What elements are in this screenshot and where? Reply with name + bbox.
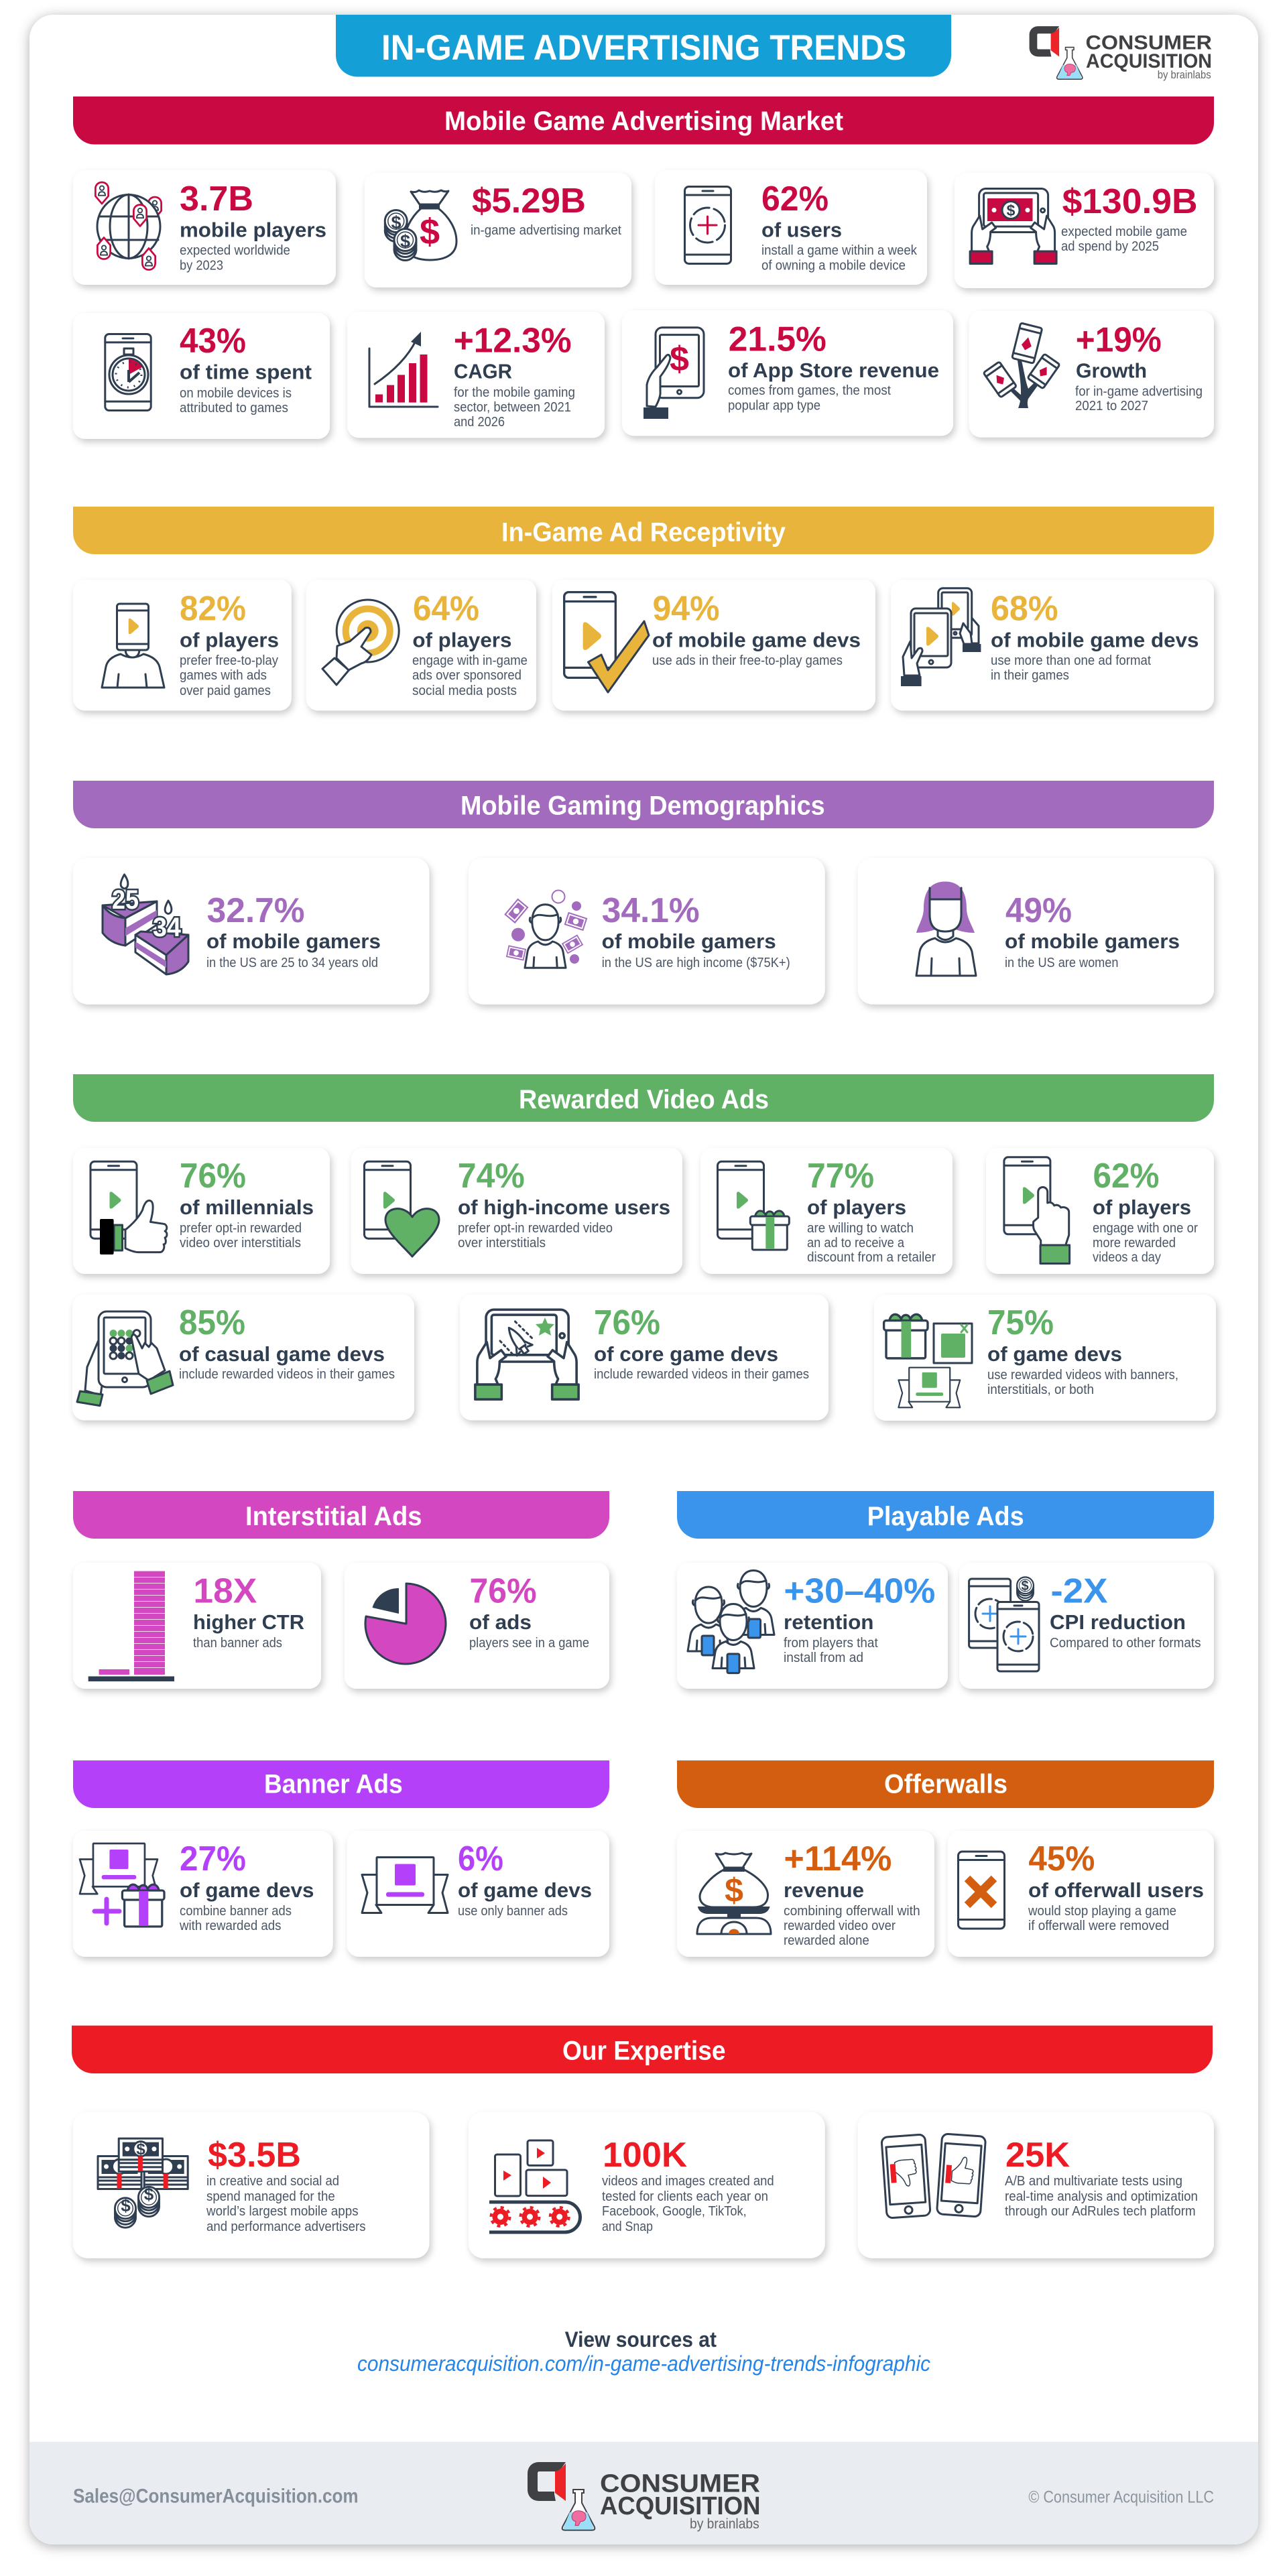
heading: In-Game Ad Receptivity	[73, 507, 1214, 554]
icon: hand holding phone with dollar	[644, 328, 704, 419]
card: +19% Growth: +19%	[1076, 321, 1162, 360]
icon: money bag and coins: $	[391, 212, 402, 233]
card: 75% of game devs: of game devs	[987, 1342, 1122, 1366]
card: 34.1% of mobile gamers high income: in the US are high income ($75K+)	[602, 956, 790, 970]
panel: Our Expertise	[72, 2026, 1214, 2258]
logo: Consumer Acquisition top: by brainlabs	[1158, 68, 1211, 81]
card: 49% of mobile gamers women: 49%	[1005, 891, 1072, 930]
card: $5.29B in-game advertising market: in-game advertising market	[471, 223, 621, 238]
card: $3.5B ad spend: $3.5B	[208, 2136, 301, 2175]
card: 74% of high-income users: of high-income users	[458, 1196, 670, 1219]
card: $3.5B ad spend	[73, 2112, 429, 2258]
card: 21.5% of App Store revenue: popular app type	[728, 398, 820, 413]
card: 3.7B mobile players	[73, 170, 336, 285]
card: +19% Growth: for in-game advertising	[1075, 385, 1203, 399]
card: 75% of game devs: 75%	[987, 1303, 1054, 1342]
card: 3.7B mobile players: 3.7B	[180, 180, 253, 218]
card: $130.9B expected ad spend	[955, 173, 1214, 288]
card: 43% of time spent: of time spent	[180, 361, 312, 383]
card: 64% of players	[306, 580, 536, 710]
panel: Interstitial Ads	[73, 1491, 609, 1689]
icon: cake slices with 25 and 34 candles: 34	[153, 913, 182, 942]
card: 25K tests: 25K	[1005, 2136, 1070, 2175]
card: $3.5B ad spend: and performance advertisers	[206, 2219, 366, 2234]
panel: Offerwalls	[677, 1760, 1214, 1957]
card: 77% of players discount: an ad to receive a	[807, 1236, 905, 1250]
logo: Consumer Acquisition top	[1030, 26, 1212, 81]
card: 25K tests: real-time analysis and optimization	[1005, 2189, 1198, 2204]
card: 21.5% of App Store revenue: of App Store revenue	[728, 359, 939, 382]
card: 74% of high-income users: prefer opt-in rewarded video	[458, 1221, 613, 1236]
card: +114% revenue	[677, 1831, 934, 1957]
card: -2X CPI reduction	[959, 1563, 1214, 1689]
heading: Interstitial Ads: Interstitial Ads	[245, 1502, 422, 1531]
card: 76% of millennials	[73, 1148, 330, 1274]
card: 77% of players discount: of players	[807, 1196, 906, 1219]
card: 62% of players daily videos	[986, 1148, 1214, 1274]
heading: Offerwalls	[677, 1760, 1214, 1808]
card: 82% of players: prefer free-to-play	[180, 653, 278, 668]
card: 27% of game devs: with rewarded ads	[179, 1919, 282, 1933]
card: 94% of mobile game devs: use ads in their free-to-play games	[652, 653, 843, 668]
card: 82% of players: over paid games	[180, 684, 271, 698]
card: 77% of players discount: 77%	[807, 1157, 874, 1196]
icon: phone with install plus	[685, 186, 731, 264]
card: 62% of players daily videos: 62%	[1093, 1157, 1160, 1196]
card: -2X CPI reduction: Compared to other formats	[1050, 1636, 1201, 1651]
card: 64% of players: of players	[412, 629, 511, 651]
card: 27% of game devs	[73, 1831, 333, 1957]
icon: person surrounded by money	[505, 890, 587, 968]
icon: money bag and coins	[385, 190, 456, 260]
card: 49% of mobile gamers women: in the US are women	[1005, 956, 1118, 970]
card: 82% of players	[73, 580, 292, 710]
card: +30-40% retention: install from ad	[784, 1651, 863, 1665]
card: $130.9B expected ad spend: $130.9B	[1062, 182, 1198, 221]
icon: money stacks and coins: $	[121, 2195, 131, 2215]
panel: Mobile Gaming Demographics	[73, 781, 1214, 1005]
card: 27% of game devs: of game devs	[180, 1878, 314, 1902]
card: 62% of users: install a game within a week	[761, 243, 918, 258]
card: $5.29B in-game advertising market	[365, 173, 631, 287]
icon: money bag and coins: $	[400, 231, 410, 251]
icon: phone with X	[959, 1852, 1004, 1929]
icon: money bag and coins: $	[420, 212, 440, 252]
card: 3.7B mobile players: expected worldwide	[180, 243, 290, 258]
card: 76% of core game devs	[460, 1295, 829, 1421]
card: 76% of millennials: video over interstitials	[180, 1236, 301, 1250]
card: 68% of mobile game devs: use more than one ad format	[991, 653, 1151, 668]
icon: banner ad	[362, 1858, 448, 1913]
card: 62% of players daily videos: engage with one or	[1093, 1221, 1198, 1236]
card: 21.5% of App Store revenue	[622, 310, 953, 436]
card: 94% of mobile game devs: of mobile game devs	[652, 629, 861, 651]
card: 68% of mobile game devs: 68%	[991, 590, 1058, 629]
card: 34.1% of mobile gamers high income: 34.1%	[602, 891, 700, 930]
card: 64% of players: 64%	[413, 590, 479, 629]
card: 34.1% of mobile gamers high income	[469, 858, 825, 1005]
card: 62% of players daily videos: videos a day	[1093, 1250, 1161, 1265]
card: 25K tests: A/B and multivariate tests using	[1005, 2174, 1182, 2189]
card: 76% of ads: players see in a game	[469, 1636, 589, 1651]
card: 32.7% of mobile gamers aged 25 to 34	[73, 858, 429, 1005]
card: 76% of core game devs: 76%	[594, 1303, 660, 1342]
card: +12.3% CAGR: +12.3%	[454, 322, 572, 361]
card: 94% of mobile game devs: 94%	[653, 590, 720, 629]
card: 45% of offerwall users: 45%	[1028, 1840, 1095, 1878]
card: 3.7B mobile players: by 2023	[180, 259, 223, 273]
sources note: consumeracquisition.com/in-game-advertising-trends-infographic	[357, 2352, 930, 2376]
card: 100K videos and images: videos and images created and	[602, 2174, 774, 2189]
heading: Playable Ads: Playable Ads	[867, 1502, 1024, 1531]
card: +30-40% retention	[677, 1563, 948, 1689]
card: +19% Growth: 2021 to 2027	[1075, 399, 1148, 413]
icon: hand holding phone with dollar: $	[670, 340, 689, 379]
card: 34.1% of mobile gamers high income: of mobile gamers	[602, 929, 776, 953]
card: 94% of mobile game devs	[552, 580, 875, 710]
icon: phone with gift	[717, 1161, 789, 1250]
card: +12.3% CAGR: for the mobile gaming	[454, 385, 575, 400]
panel: Playable Ads	[677, 1491, 1214, 1689]
card: +114% revenue: rewarded alone	[784, 1933, 869, 1948]
panel: Banner Ads	[73, 1760, 609, 1957]
heading: Mobile Game Advertising Market: Mobile Game Advertising Market	[444, 107, 843, 136]
card: 43% of time spent	[73, 313, 330, 439]
icon: hands holding tablet with rocket game	[475, 1309, 578, 1399]
title banner: IN-GAME ADVERTISING TRENDS	[381, 28, 906, 68]
icon: hands holding tablet with banknote: $	[1007, 202, 1016, 219]
card: +114% revenue: combining offerwall with	[784, 1904, 920, 1919]
card: 18X higher CTR	[73, 1563, 321, 1689]
card: 64% of players: social media posts	[412, 684, 517, 698]
panel: Mobile Game Advertising Market	[73, 96, 1214, 439]
sources note	[357, 2327, 930, 2376]
panel: Rewarded Video Ads	[72, 1074, 1216, 1421]
heading: Banner Ads	[73, 1760, 609, 1808]
card: -2X CPI reduction: CPI reduction	[1050, 1610, 1186, 1634]
card: +12.3% CAGR	[347, 312, 605, 438]
card: 32.7% of mobile gamers aged 25 to 34: of mobile gamers	[206, 929, 381, 953]
icon: three people holding phones	[688, 1571, 774, 1673]
icon: cake slices with 25 and 34 candles	[103, 875, 188, 974]
card: +12.3% CAGR: and 2026	[454, 415, 505, 430]
card: +30-40% retention: from players that	[784, 1636, 878, 1651]
card: +30-40% retention: +30–40%	[784, 1572, 935, 1611]
card: 76% of core game devs: of core game devs	[594, 1342, 778, 1366]
card: 43% of time spent: attributed to games	[180, 401, 288, 415]
heading: Rewarded Video Ads: Rewarded Video Ads	[519, 1085, 769, 1114]
icon: phones with plus and coins	[969, 1577, 1039, 1671]
icon: phone with pointing hand	[1004, 1157, 1070, 1264]
card: 6% of game devs: use only banner ads	[458, 1904, 568, 1919]
heading: In-Game Ad Receptivity: In-Game Ad Receptivity	[501, 517, 786, 547]
card: 3.7B mobile players: mobile players	[180, 218, 326, 241]
icon: phone with check mark	[564, 592, 649, 692]
card: 62% of users: 62%	[761, 180, 829, 218]
card: 85% of casual game devs: 85%	[179, 1303, 245, 1342]
footer logo: ACQUISITION	[600, 2492, 760, 2520]
card: 100K videos and images: and Snap	[602, 2219, 653, 2234]
card: 68% of mobile game devs: in their games	[991, 668, 1069, 683]
card: 45% of offerwall users: would stop playing a game	[1028, 1904, 1176, 1919]
card: 18X higher CTR: higher CTR	[193, 1610, 304, 1634]
heading: Banner Ads: Banner Ads	[264, 1769, 403, 1799]
footer logo: CONSUMER	[600, 2470, 760, 2498]
card: 45% of offerwall users: of offerwall users	[1028, 1878, 1204, 1902]
card: 18X higher CTR: than banner ads	[193, 1636, 282, 1651]
footer copyright: © Consumer Acquisition LLC	[1028, 2488, 1214, 2507]
icon: gift, interstitial and banner	[884, 1314, 972, 1407]
card: 62% of users: of users	[761, 218, 842, 241]
card: $3.5B ad spend: spend managed for the	[206, 2189, 335, 2204]
card: 43% of time spent: on mobile devices is	[180, 386, 292, 401]
icon: target with tapping hand	[322, 600, 399, 685]
card: $130.9B expected ad spend: expected mobile game	[1061, 224, 1187, 239]
card: 25K tests: through our AdRules tech platform	[1005, 2204, 1196, 2219]
icon: banner plus gift	[80, 1844, 164, 1927]
card: 85% of casual game devs	[72, 1295, 414, 1421]
card: 21.5% of App Store revenue: comes from games, the most	[728, 383, 891, 398]
card: $130.9B expected ad spend: ad spend by 2025	[1061, 239, 1159, 254]
icon: phones with plus and coins: $	[1021, 1579, 1029, 1594]
icon: phones with thumbs down and up	[881, 2134, 986, 2218]
heading: Mobile Gaming Demographics	[73, 781, 1214, 828]
card: -2X CPI reduction: -2X	[1051, 1572, 1108, 1611]
card: 82% of players: games with ads	[180, 668, 267, 683]
card: $3.5B ad spend: world’s largest mobile apps	[206, 2204, 359, 2219]
card: 62% of users: of owning a mobile device	[761, 259, 906, 273]
footer email: Sales@ConsumerAcquisition.com	[73, 2486, 359, 2508]
card: 100K videos and images: 100K	[603, 2136, 687, 2175]
card: 76% of ads	[345, 1563, 609, 1689]
card: 82% of players: 82%	[180, 590, 246, 629]
card: 6% of game devs: of game devs	[458, 1878, 592, 1902]
card: 18X higher CTR: 18X	[193, 1572, 257, 1611]
card: 43% of time spent: 43%	[180, 322, 246, 361]
card: $3.5B ad spend: in creative and social ad	[206, 2174, 339, 2189]
card: 85% of casual game devs: include rewarded videos in their games	[179, 1367, 395, 1382]
card: 32.7% of mobile gamers aged 25 to 34: in the US are 25 to 34 years old	[206, 956, 378, 970]
icon: phone with heart	[365, 1161, 439, 1257]
panel: In-Game Ad Receptivity	[73, 507, 1214, 710]
heading: Our Expertise: Our Expertise	[562, 2037, 725, 2066]
icon: money stacks and coins: $	[136, 2140, 145, 2159]
card: 45% of offerwall users	[948, 1831, 1214, 1957]
card: 64% of players: ads over sponsored	[412, 668, 522, 683]
card: 76% of core game devs: include rewarded videos in their games	[594, 1367, 809, 1382]
card: 25K tests	[858, 2112, 1214, 2258]
card: 82% of players: of players	[180, 629, 279, 651]
card: 27% of game devs: 27%	[180, 1840, 246, 1878]
icon: conveyor of video creatives	[489, 2140, 580, 2232]
icon: phone with thumbs up	[90, 1161, 167, 1254]
card: 21.5% of App Store revenue: 21.5%	[729, 320, 826, 359]
card: +114% revenue: +114%	[784, 1840, 892, 1878]
card: 62% of players daily videos: of players	[1093, 1196, 1191, 1219]
card: 77% of players discount	[700, 1148, 953, 1274]
icon: hands playing match game on phone	[77, 1311, 173, 1406]
logo: Consumer Acquisition top: CONSUMER	[1086, 32, 1212, 54]
card: $5.29B in-game advertising market: $5.29B	[472, 182, 586, 220]
sources note: View sources at	[565, 2327, 717, 2352]
icon: money bag on scale: $	[725, 1872, 743, 1909]
heading: Mobile Gaming Demographics: Mobile Gaming Demographics	[461, 791, 825, 820]
card: 76% of ads: 76%	[469, 1572, 536, 1611]
card: 49% of mobile gamers women	[858, 858, 1214, 1005]
card: 27% of game devs: combine banner ads	[180, 1904, 292, 1919]
card: 32.7% of mobile gamers aged 25 to 34: 32.7%	[207, 891, 305, 930]
card: 76% of millennials: of millennials	[180, 1196, 314, 1219]
icon: hands holding tablet with banknote	[970, 189, 1056, 264]
card: 64% of players: engage with in-game	[412, 653, 528, 668]
heading: Our Expertise	[72, 2026, 1213, 2073]
card: +19% Growth: Growth	[1076, 359, 1147, 383]
card: 68% of mobile game devs	[891, 580, 1214, 710]
icon: globe with player pins	[95, 182, 162, 270]
icon: money bag on scale	[697, 1853, 771, 1934]
card: 100K videos and images: Facebook, Google, TikTok,	[602, 2204, 747, 2219]
icon: two phones in hands	[901, 588, 981, 686]
card: 6% of game devs: 6%	[458, 1840, 503, 1878]
icon: tree growing phones	[983, 323, 1060, 408]
heading: Interstitial Ads	[73, 1491, 609, 1539]
card: 76% of millennials: prefer opt-in rewarded	[180, 1221, 302, 1236]
card: +114% revenue: rewarded video over	[784, 1919, 896, 1933]
card: 75% of game devs: use rewarded videos with banners,	[987, 1368, 1178, 1382]
card: +114% revenue: revenue	[784, 1878, 864, 1902]
card: 45% of offerwall users: if offerwall were removed	[1028, 1919, 1169, 1933]
card: +12.3% CAGR: sector, between 2021	[454, 400, 571, 415]
card: 68% of mobile game devs: of mobile game devs	[991, 629, 1199, 651]
icon: phone with stopwatch	[105, 334, 151, 411]
icon: pie chart 76 percent	[365, 1584, 446, 1664]
card: 100K videos and images: tested for clients each year on	[602, 2189, 768, 2204]
heading: Offerwalls: Offerwalls	[884, 1769, 1007, 1799]
heading: Playable Ads	[677, 1491, 1214, 1539]
card: 49% of mobile gamers women: of mobile gamers	[1005, 929, 1180, 953]
card: 77% of players discount: discount from a retailer	[807, 1250, 936, 1265]
card: +30-40% retention: retention	[784, 1610, 874, 1634]
logo: Consumer Acquisition top: ACQUISITION	[1086, 50, 1212, 72]
card: 74% of high-income users: over interstitials	[458, 1236, 546, 1250]
card: 74% of high-income users: 74%	[458, 1157, 525, 1196]
heading: Mobile Game Advertising Market	[73, 96, 1214, 145]
card: 85% of casual game devs: of casual game devs	[179, 1342, 385, 1366]
icon: money stacks and coins: $	[144, 2184, 154, 2204]
footer logo	[528, 2462, 760, 2532]
card: 76% of ads: of ads	[469, 1610, 532, 1634]
card: 62% of players daily videos: more rewarded	[1093, 1236, 1176, 1250]
card: 62% of users	[655, 170, 927, 285]
icon: tall bar versus small bar	[88, 1571, 174, 1681]
card: 75% of game devs	[874, 1295, 1216, 1421]
card: 76% of millennials: 76%	[180, 1157, 246, 1196]
heading: Rewarded Video Ads	[73, 1074, 1214, 1122]
footer logo: by brainlabs	[690, 2516, 759, 2532]
card: 77% of players discount: are willing to watch	[807, 1221, 914, 1236]
icon: woman with purple hair	[916, 882, 976, 976]
card: +12.3% CAGR: CAGR	[454, 360, 512, 383]
card: 6% of game devs	[347, 1831, 609, 1957]
card: 74% of high-income users	[351, 1148, 682, 1274]
icon: cake slices with 25 and 34 candles: 25	[112, 885, 139, 915]
title banner	[336, 15, 951, 76]
footer	[29, 2442, 1258, 2545]
card: 75% of game devs: interstitials, or both	[987, 1382, 1094, 1397]
icon: money stacks and coins	[98, 2138, 188, 2228]
icon: rising bar chart with arrow	[369, 332, 438, 407]
icon: person with phone head	[102, 604, 164, 688]
card: 100K videos and images	[469, 2112, 825, 2258]
card: +19% Growth	[969, 311, 1214, 438]
